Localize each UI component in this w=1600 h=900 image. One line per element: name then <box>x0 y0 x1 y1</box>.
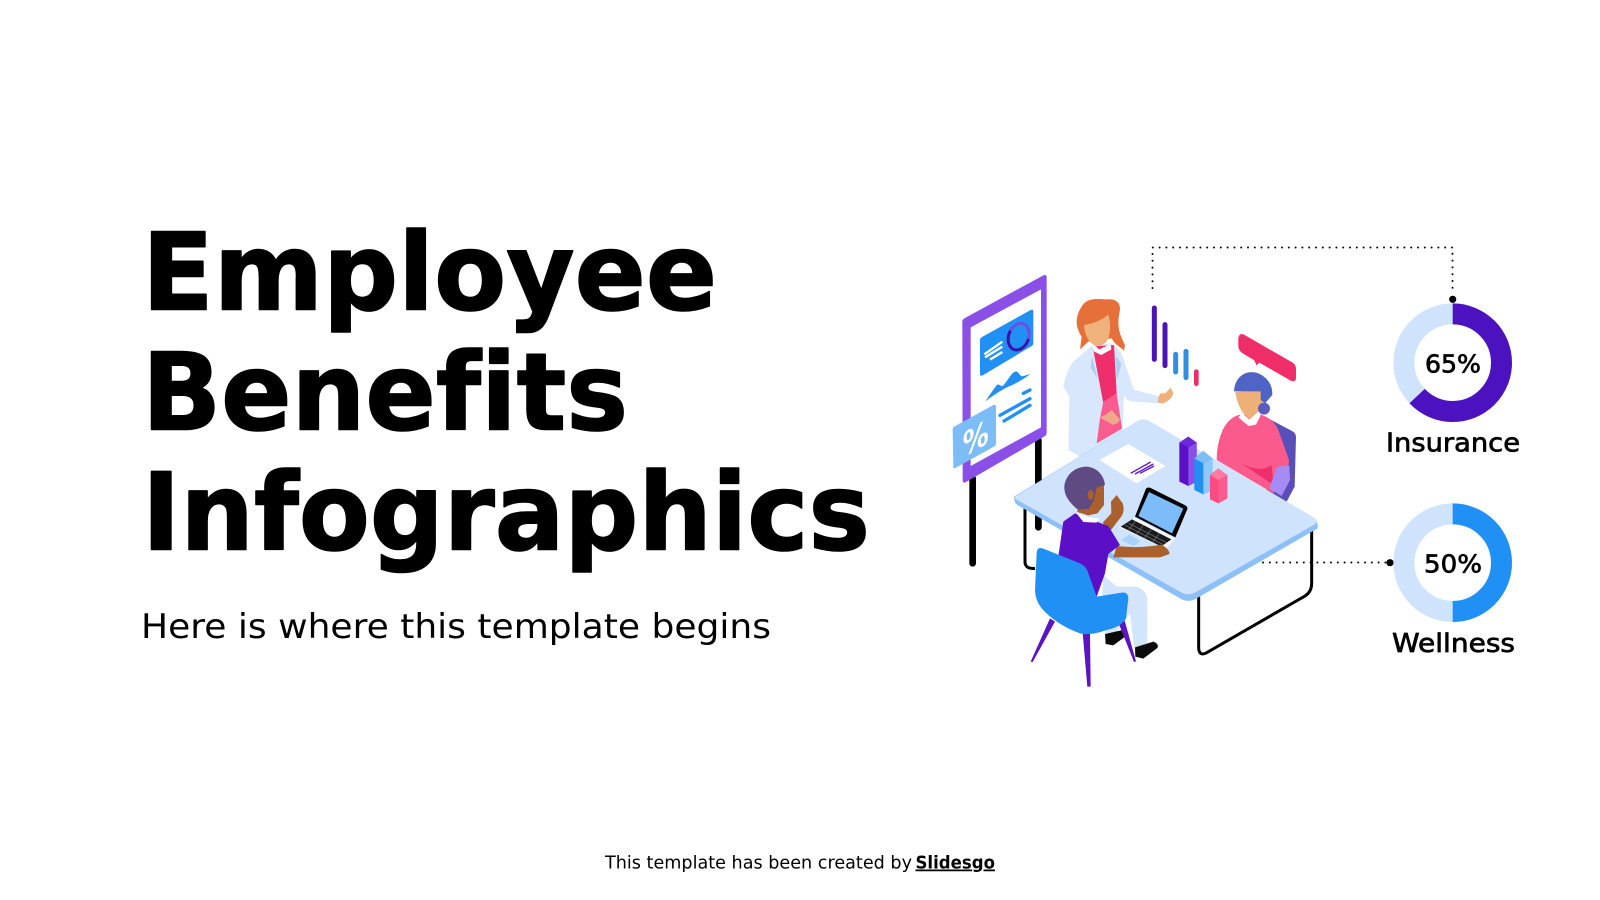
desk <box>1014 419 1318 654</box>
man seated at laptop <box>1031 467 1187 687</box>
blue chair <box>1031 548 1136 687</box>
footer credit: Slidesgo <box>916 854 995 874</box>
laptop <box>1119 487 1187 548</box>
illustration: office meeting <box>953 275 1318 687</box>
donut chart: wellness 50%: 50% <box>1424 550 1482 578</box>
title: Infographics <box>142 452 870 576</box>
seated woman on right <box>1217 372 1296 502</box>
woman standing in lab coat <box>1063 299 1173 457</box>
connector: wellness <box>1263 562 1386 564</box>
donut chart: insurance 65% <box>1404 314 1502 412</box>
mini bar chart <box>1154 308 1196 384</box>
pants and shoes <box>1102 575 1158 659</box>
label: insurance: Insurance <box>1386 428 1520 458</box>
desk 3D bar chart <box>1179 437 1227 503</box>
title: Benefits <box>142 332 628 456</box>
shirt and arms <box>1058 467 1169 597</box>
percent card: % <box>963 412 989 466</box>
presentation board <box>962 275 1047 483</box>
connector: insurance <box>1152 248 1452 293</box>
speech bubble <box>1238 334 1296 381</box>
presentation board legs <box>973 440 1038 563</box>
title: Employee <box>142 212 717 336</box>
footer credit: This template has been created by <box>604 854 912 874</box>
donut chart: wellness 50% <box>1404 514 1502 612</box>
donut chart: insurance 65%: 65% <box>1425 350 1481 378</box>
percent card <box>953 405 996 468</box>
connector dots <box>1386 296 1456 566</box>
paper on desk <box>1099 444 1165 483</box>
label: wellness: Wellness <box>1392 629 1515 659</box>
subtitle: Here is where this template begins <box>141 607 771 647</box>
title <box>142 212 870 576</box>
